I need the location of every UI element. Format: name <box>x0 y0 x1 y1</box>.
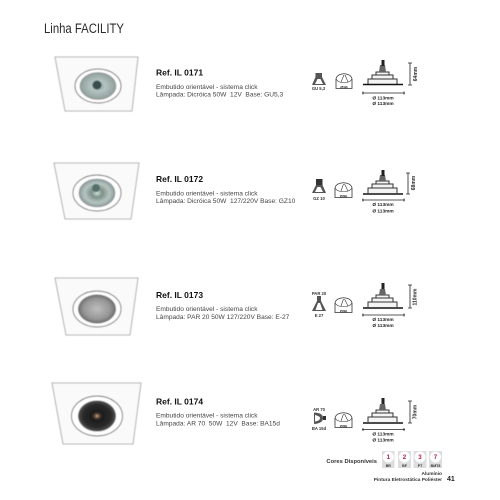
housing diagram 0172: Ø 113mm <box>372 202 394 208</box>
legend label: Cores Disponíveis <box>326 459 377 465</box>
luminaire photo 0173 <box>55 278 138 335</box>
housing diagram 0171: Ø 113mm <box>372 96 394 102</box>
text block 0174: Lâmpada: AR 70 50W 12V Base: BA15d <box>156 420 280 428</box>
lamp and cutout icons 0173: Ø96 <box>340 308 348 314</box>
text block 0171: Embutido orientável - sistema click <box>156 84 258 91</box>
housing diagram 0173: 110mm <box>412 288 418 305</box>
text block 0174: Embutido orientável - sistema click <box>156 412 258 420</box>
page number: 41 <box>447 476 455 483</box>
swatch 2 BF <box>398 451 411 468</box>
text block 0171: Ref. IL 0171 <box>156 68 203 78</box>
luminaire photo 0174 <box>52 383 141 444</box>
housing diagram 0173 <box>362 283 418 329</box>
text block 0172: Embutido orientável - sistema click <box>156 190 258 198</box>
text block 0171: Lâmpada: Dicróica 50W 12V Base: GU5,3 <box>156 92 284 98</box>
lamp and cutout icons 0173: PAR 20 <box>312 291 327 296</box>
housing diagram 0171: Ø 113mm <box>372 101 394 107</box>
swatch 3 PT: PT <box>418 464 423 468</box>
housing diagram 0171 <box>362 60 419 107</box>
text block 0172: Ref. IL 0172 <box>156 174 203 184</box>
swatch 1 BR: BR <box>386 464 391 468</box>
housing diagram 0173: Ø 113mm <box>372 323 394 329</box>
text block 0173: Embutido orientável - sistema click <box>156 306 258 313</box>
text block 0173 <box>156 290 290 321</box>
swatch 3 PT <box>414 451 426 468</box>
swatch 7 BMT8: 7 <box>434 454 438 461</box>
swatch 2 BF: 2 <box>403 454 407 461</box>
housing diagram 0174: Ø 113mm <box>372 438 394 444</box>
housing diagram 0174: 70mm <box>412 404 418 419</box>
luminaire photo 0172 <box>54 163 139 219</box>
housing diagram 0174: Ø 113mm <box>372 432 394 438</box>
swatch 7 BMT8: BMT8 <box>431 464 440 468</box>
lamp and cutout icons 0174: Ø96 <box>340 424 348 428</box>
lamp and cutout icons 0174: AR 70 <box>313 407 326 412</box>
swatch 1 BR: 1 <box>387 454 391 461</box>
luminaire photo 0171 <box>55 57 138 111</box>
material note <box>374 471 442 483</box>
text block 0171 <box>156 68 284 98</box>
swatch 1 BR <box>382 451 394 468</box>
lamp and cutout icons 0174 <box>312 407 352 431</box>
housing diagram 0172 <box>362 170 417 214</box>
housing diagram 0171: 64mm <box>413 66 419 81</box>
swatch 3 PT: 3 <box>418 454 422 461</box>
title: Linha FACILITY <box>44 21 124 36</box>
housing diagram 0172: 68mm <box>411 175 417 190</box>
lamp and cutout icons 0174: BA 15d <box>312 426 327 431</box>
text block 0174: Ref. IL 0174 <box>156 396 203 406</box>
lamp and cutout icons 0172: GZ 10 <box>313 196 325 201</box>
housing diagram 0174 <box>362 398 418 444</box>
text block 0172 <box>156 174 296 205</box>
material note: Pintura Eletrostática Poliéster <box>374 477 442 483</box>
lamp and cutout icons 0173 <box>312 291 352 318</box>
lamp and cutout icons 0173: E 27 <box>315 313 324 318</box>
text block 0172: Lâmpada: Dicróica 50W 127/220V Base: GZ10 <box>156 198 296 205</box>
text block 0174 <box>156 396 280 428</box>
text block 0173: Ref. IL 0173 <box>156 290 203 300</box>
colour legend <box>326 451 442 468</box>
lamp and cutout icons 0171: Ø96 <box>340 84 349 90</box>
housing diagram 0173: Ø 113mm <box>372 317 394 323</box>
material note: Alumínio <box>421 471 442 477</box>
text block 0173: Lâmpada: PAR 20 50W 127/220V Base: E-27 <box>156 314 290 321</box>
lamp and cutout icons 0171: GU 5,3 <box>312 86 326 91</box>
panel: IL 0172 <box>54 163 417 219</box>
panel: IL 0174 <box>52 383 418 444</box>
lamp and cutout icons 0172: Ø96 <box>340 194 348 198</box>
swatch 7 BMT8 <box>429 451 442 468</box>
panel: IL 0173 <box>55 278 418 335</box>
panel: IL 0171 <box>55 57 419 111</box>
swatch 2 BF: BF <box>402 464 408 468</box>
housing diagram 0172: Ø 113mm <box>372 208 394 214</box>
lamp and cutout icons 0171 <box>312 73 352 91</box>
lamp and cutout icons 0172 <box>312 179 352 201</box>
